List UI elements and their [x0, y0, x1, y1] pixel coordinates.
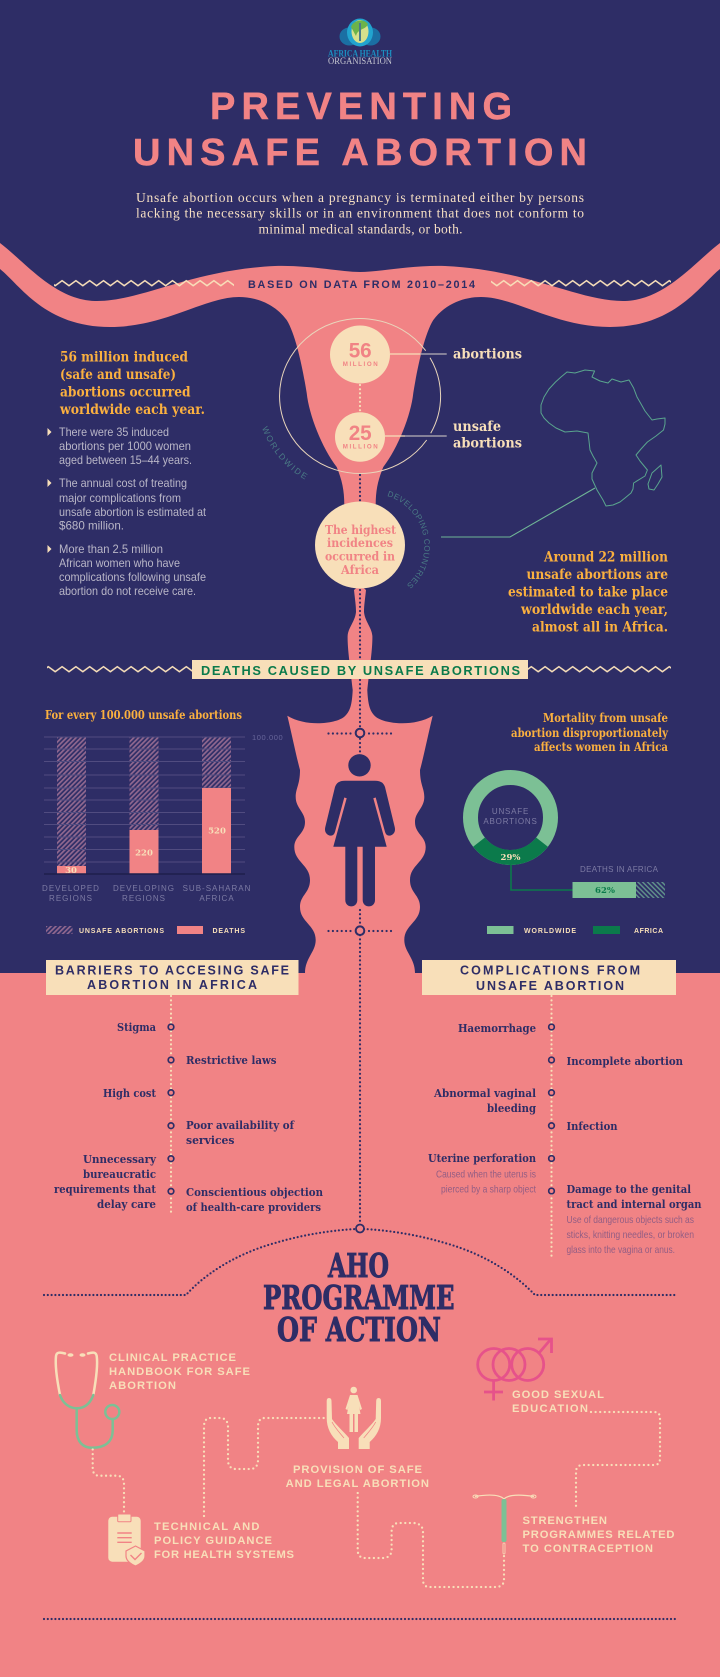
- right text block: estimated to take place: [508, 584, 668, 600]
- dotted arch divider: [44, 1224, 677, 1295]
- right text block: worldwide each year,: [520, 602, 668, 618]
- stat: 56 million: 56: [349, 340, 372, 363]
- complication notes: [436, 1168, 694, 1256]
- icon: gender symbols: [478, 1339, 552, 1400]
- section banner: deaths: [47, 660, 671, 679]
- complication labels: Incomplete abortion: [566, 1054, 684, 1068]
- section label: based on data: BASED ON DATA FROM 2010–2014: [248, 279, 475, 291]
- marker: bottom of body: [328, 926, 392, 935]
- title: PREVENTING: [210, 86, 512, 128]
- intro text: minimal medical standards, or both.: [258, 222, 462, 236]
- heading: COMPLICATIONS FROM: [460, 964, 640, 978]
- headline: worldwide each year.: [59, 402, 205, 418]
- icon: clipboard and shield: [108, 1514, 145, 1566]
- legend: UNSAFE ABORTIONS: [79, 928, 164, 935]
- callout: highest incidences: Africa: [340, 562, 379, 577]
- chart: donut: 29%: [501, 853, 520, 863]
- heading: AHO programme of action: PROGRAMME: [263, 1278, 454, 1317]
- icon: hands holding woman: [327, 1387, 381, 1449]
- legend: AFRICA: [634, 928, 663, 935]
- timeline rings: [168, 1024, 174, 1194]
- callout: highest incidences: The highest: [325, 522, 396, 537]
- legend: WORLDWIDE: [524, 928, 576, 935]
- text: clinical practice: CLINICAL PRACTICE: [109, 1352, 237, 1364]
- panel: complications: [422, 960, 702, 1256]
- headline: [59, 350, 205, 418]
- left text block: [48, 350, 207, 598]
- intro text: Unsafe abortion occurs when a pregnancy is terminated either by persons: [136, 190, 584, 205]
- connector to bar: [511, 865, 572, 890]
- worldwide ring: [280, 319, 441, 474]
- right text block: [508, 550, 668, 636]
- barrier labels: High cost: [103, 1086, 157, 1100]
- mortality text: abortion disproportionately: [511, 726, 669, 740]
- barrier labels: bureaucratic: [83, 1167, 156, 1181]
- headline: 56 million induced: [60, 350, 188, 366]
- text: clinical practice: [109, 1352, 251, 1392]
- bullets: The annual cost of treating: [59, 476, 187, 490]
- stat: 56 million: [330, 326, 390, 384]
- heading: ABORTION IN AFRICA: [87, 978, 257, 992]
- axis label: 100.000: [252, 733, 283, 742]
- text: strengthen programmes: PROGRAMMES RELATED: [522, 1529, 674, 1541]
- chart title: For every 100.000 unsafe abortions: [45, 708, 242, 722]
- intro text: [136, 190, 584, 236]
- category labels: [42, 884, 251, 903]
- bullets: aged between 15–44 years.: [59, 453, 192, 467]
- bottom dotted rule: [44, 1618, 677, 1620]
- bullets: More than 2.5 million: [59, 542, 163, 556]
- grid lines: [44, 737, 245, 862]
- heading: [46, 960, 298, 995]
- category labels: DEVELOPING: [113, 884, 175, 893]
- text: technical and policy guidance: FOR HEALTH SYSTEMS: [154, 1549, 295, 1561]
- uterus illustration: [0, 243, 720, 973]
- legend: [46, 926, 245, 935]
- icon: Africa map outline: [541, 370, 665, 506]
- section banner: deaths: DEATHS CAUSED BY UNSAFE ABORTIONS: [201, 663, 520, 678]
- barrier labels: Conscientious objection: [186, 1185, 324, 1199]
- callout: highest incidences: [315, 502, 405, 588]
- bar values: [65, 826, 226, 876]
- bullets: unsafe abortion is estimated at: [59, 505, 207, 519]
- barrier labels: services: [186, 1133, 234, 1147]
- bar values: 220: [135, 848, 153, 858]
- label: abortions: [390, 346, 522, 362]
- category labels: AFRICA: [199, 894, 235, 903]
- barrier labels: delay care: [97, 1197, 156, 1211]
- title: UNSAFE ABORTION: [133, 132, 587, 174]
- stat: 25 million: 25: [349, 422, 372, 445]
- deaths in Africa bar: DEATHS IN AFRICA: [580, 865, 659, 874]
- bullets: $680 million.: [59, 518, 124, 532]
- barrier labels: Restrictive laws: [186, 1053, 276, 1067]
- background: pink lower section: [0, 973, 720, 1677]
- heading: UNSAFE ABORTION: [476, 979, 624, 993]
- heading: [422, 960, 676, 995]
- logo: Africa Health Organisation: ORGANISATION: [328, 57, 392, 67]
- text: good sexual education: EDUCATION: [512, 1403, 588, 1415]
- stat: 25 million: MILLION: [343, 443, 378, 450]
- hatch bars: [57, 737, 231, 866]
- bullets: complications following unsafe: [59, 570, 206, 584]
- complication labels: Damage to the genital: [566, 1182, 692, 1196]
- heading: AHO programme of action: OF ACTION: [277, 1310, 441, 1349]
- mortality text: affects women in Africa: [534, 740, 668, 754]
- deaths in Africa bar: [572, 865, 665, 898]
- text: technical and policy guidance: TECHNICAL AND: [154, 1521, 260, 1533]
- complication labels: Infection: [566, 1119, 618, 1133]
- right text block: unsafe abortions are: [526, 567, 668, 583]
- headline: (safe and unsafe): [60, 367, 176, 383]
- deaths bars: [57, 788, 231, 874]
- heading: AHO programme of action: AHO: [327, 1246, 389, 1285]
- right text block: Around 22 million: [543, 550, 668, 566]
- bullets: African women who have: [59, 556, 180, 570]
- heading: AHO programme of action: [263, 1246, 454, 1349]
- complication notes: sticks, knitting needles, or broken: [566, 1229, 694, 1241]
- callout: highest incidences: incidences: [327, 535, 393, 550]
- intro text: lacking the necessary skills or in an environment that does not conform to: [136, 206, 584, 220]
- category labels: DEVELOPED: [42, 884, 100, 893]
- arrow: stethoscope to clipboard: [93, 1450, 124, 1513]
- text: provision of safe and legal abortion: AND LEGAL ABORTION: [286, 1478, 429, 1490]
- center dotted connectors: [359, 385, 361, 1224]
- text: good sexual education: [512, 1389, 604, 1415]
- panel: barriers: [46, 960, 324, 1216]
- chart: unsafe abortions and deaths: [42, 708, 283, 935]
- leader line: Africa: [441, 488, 595, 537]
- complication labels: Haemorrhage: [458, 1021, 536, 1035]
- text: strengthen programmes: [522, 1515, 674, 1555]
- complication notes: glass into the vagina or anus.: [566, 1244, 675, 1256]
- headline: abortions occurred: [60, 384, 191, 400]
- bullets: abortions per 1000 women: [59, 439, 191, 453]
- bullets: [48, 425, 207, 598]
- text: provision of safe and legal abortion: PROVISION OF SAFE: [293, 1464, 423, 1476]
- category labels: REGIONS: [49, 894, 93, 903]
- text: clinical practice: ABORTION: [109, 1380, 176, 1392]
- mortality text: [511, 711, 669, 754]
- complication notes: Use of dangerous objects such as: [566, 1214, 694, 1226]
- logo: Africa Health Organisation: AFRICA HEALTH: [328, 50, 392, 60]
- deaths in Africa bar: 62%: [595, 886, 615, 896]
- arrow: policy guidance to provision: [204, 1418, 328, 1516]
- complication notes: Caused when the uterus is: [436, 1168, 536, 1180]
- curved label: developing countries: DEVELOPING COUNTRIES: [388, 491, 430, 588]
- text: good sexual education: GOOD SEXUAL: [512, 1389, 604, 1401]
- barrier labels: requirements that: [54, 1182, 157, 1196]
- complication labels: Abnormal vaginal: [433, 1086, 537, 1100]
- bullets: major complications from: [59, 491, 181, 505]
- curved label: worldwide: WORLDWIDE: [262, 426, 308, 480]
- icon: IUD: [473, 1495, 536, 1554]
- complication labels: bleeding: [487, 1101, 536, 1115]
- icon: woman figure: [325, 754, 395, 906]
- legend: DEATHS: [212, 928, 245, 935]
- complication labels: [428, 1021, 702, 1211]
- title: [133, 86, 587, 174]
- category labels: SUB-SAHARAN: [183, 884, 251, 893]
- text: clinical practice: HANDBOOK FOR SAFE: [109, 1366, 251, 1378]
- marker: top of body: [328, 729, 392, 737]
- text: technical and policy guidance: [154, 1521, 295, 1561]
- complication labels: tract and internal organ: [566, 1197, 702, 1211]
- text: provision of safe and legal abortion: [286, 1464, 429, 1490]
- legend: [487, 926, 663, 935]
- timeline rings: [549, 1024, 554, 1194]
- bullets: abortion do not receive care.: [59, 584, 196, 598]
- text: technical and policy guidance: POLICY GUIDANCE: [154, 1535, 273, 1547]
- section label: based on data: [54, 279, 671, 291]
- barrier labels: Poor availability of: [186, 1118, 295, 1132]
- bar values: 30: [65, 866, 77, 876]
- logo: Africa Health Organisation: [328, 18, 392, 67]
- chart: donut: [470, 778, 665, 935]
- barrier labels: Stigma: [117, 1020, 156, 1034]
- icon: stethoscope: [56, 1353, 119, 1448]
- label: unsafe abortions: unsafe: [453, 419, 501, 435]
- chart: donut: ABORTIONS: [483, 817, 538, 826]
- stat: 25 million: [335, 412, 385, 462]
- text: strengthen programmes: STRENGTHEN: [522, 1515, 607, 1527]
- right text block: almost all in Africa.: [532, 620, 668, 636]
- callout: highest incidences: occurred in: [325, 548, 395, 564]
- mortality text: Mortality from unsafe: [543, 711, 668, 725]
- label: unsafe abortions: abortions: [453, 436, 522, 452]
- heading: BARRIERS TO ACCESING SAFE: [55, 964, 289, 978]
- complication labels: Uterine perforation: [428, 1151, 537, 1165]
- chart: donut: UNSAFE: [492, 807, 529, 816]
- arrow: provision to IUD: [358, 1493, 504, 1587]
- bullets: There were 35 induced: [59, 425, 169, 439]
- stat: 56 million: MILLION: [343, 361, 378, 368]
- bar values: 520: [208, 826, 226, 836]
- label: unsafe abortions: [385, 419, 522, 452]
- barrier labels: [54, 1020, 324, 1214]
- category labels: REGIONS: [122, 894, 166, 903]
- label: abortions: abortions: [453, 346, 522, 362]
- barrier labels: Unnecessary: [83, 1152, 156, 1166]
- complication notes: pierced by a sharp object: [441, 1184, 536, 1196]
- arrow: sexual education to contraception: [576, 1412, 660, 1508]
- barrier labels: of health-care providers: [186, 1200, 321, 1214]
- text: strengthen programmes: TO CONTRACEPTION: [522, 1543, 653, 1555]
